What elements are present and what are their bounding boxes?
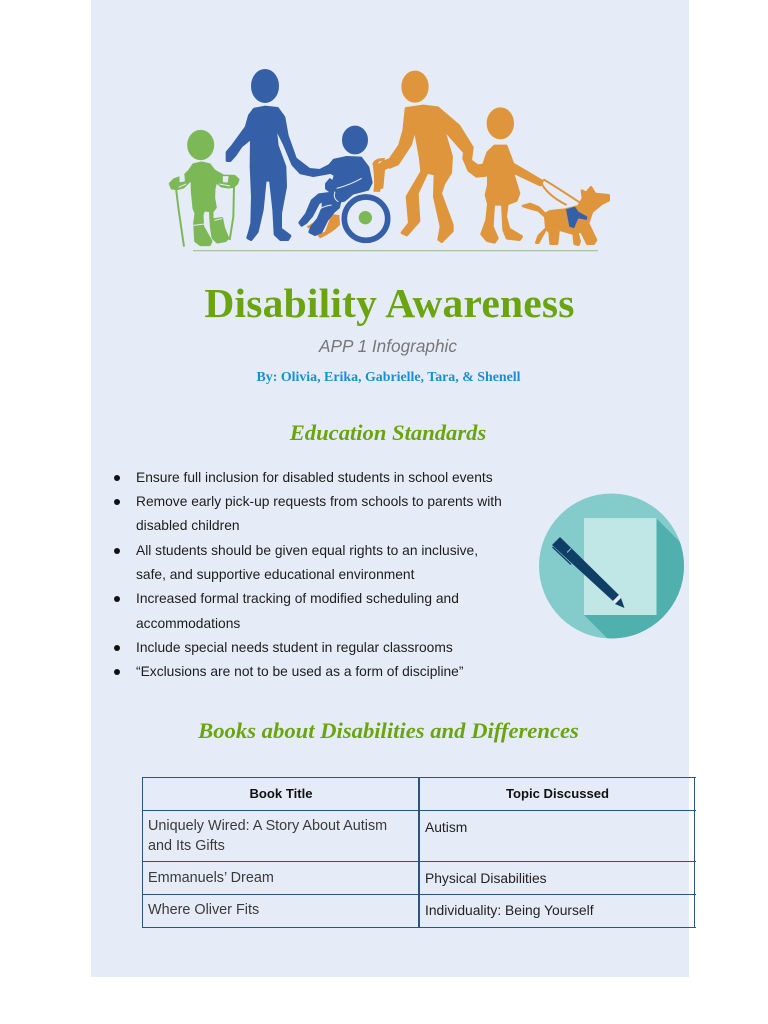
book 1 title bbox=[148, 818, 387, 854]
icon: paper and pen bbox=[539, 494, 684, 638]
list: education standards: accommodations bbox=[136, 616, 240, 630]
heading: books: Books about Disabilities and Differences bbox=[198, 718, 579, 743]
figure: guide dog with harness and leash bbox=[523, 179, 609, 245]
list: education standards: disabled children bbox=[136, 518, 240, 532]
table: books bbox=[142, 777, 696, 928]
list: education standards: “Exclusions are not to be used as a form of discipline” bbox=[136, 664, 463, 678]
list: education standards: Remove early pick-up requests from schools to parents with bbox=[136, 494, 502, 508]
list: education standards: Increased formal tracking of modified scheduling and bbox=[136, 590, 459, 606]
figure: wheelchair handle and footrest bbox=[307, 158, 392, 238]
illustration: people with disabilities bbox=[168, 69, 610, 252]
title: Disability Awareness bbox=[204, 280, 575, 326]
background panel bbox=[91, 0, 689, 977]
table header: topic discussed: Topic Discussed bbox=[506, 786, 609, 800]
figure: blue wheelchair user bbox=[300, 127, 371, 235]
figure: wheelchair wheel bbox=[344, 197, 388, 240]
subtitle: APP 1 Infographic bbox=[319, 336, 457, 356]
book 1 title: and Its Gifts bbox=[148, 838, 225, 854]
figure: green child with crutches bbox=[170, 131, 238, 247]
figure: orange adult and child bbox=[373, 72, 542, 242]
list: education standards: Include special needs student in regular classrooms bbox=[136, 640, 453, 654]
figure: blue adult holding hands bbox=[227, 71, 330, 239]
book 3 title: Where Oliver Fits bbox=[148, 902, 259, 918]
ground line bbox=[193, 250, 598, 251]
book 1 topic: Autism bbox=[425, 818, 467, 834]
list: education standards bbox=[114, 470, 502, 679]
list: education standards: Ensure full inclusion for disabled students in school events bbox=[136, 470, 493, 484]
book 1 title: Uniquely Wired: A Story About Autism bbox=[148, 818, 387, 834]
heading: education standards: Education Standards bbox=[290, 420, 486, 445]
list: education standards: safe, and supportive educational environment bbox=[136, 566, 414, 582]
book 2 topic: Physical Disabilities bbox=[425, 870, 547, 886]
table header: book title: Book Title bbox=[249, 786, 313, 800]
authors: By: Olivia, Erika, Gabrielle, Tara, & Shenell bbox=[257, 370, 520, 385]
book 2 title: Emmanuels’ Dream bbox=[148, 870, 274, 886]
book 3 topic: Individuality: Being Yourself bbox=[425, 902, 594, 918]
list: education standards: All students should be given equal rights to an inclusive, bbox=[136, 542, 478, 558]
